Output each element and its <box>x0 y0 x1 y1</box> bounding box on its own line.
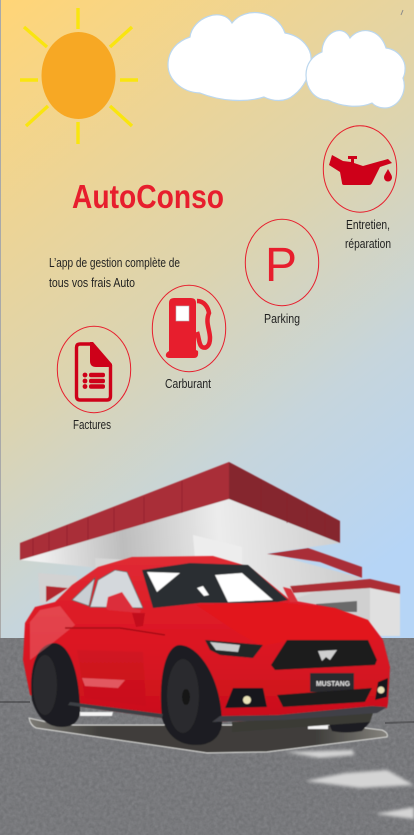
windshield <box>142 563 288 608</box>
hood <box>196 602 378 646</box>
rear canopy <box>267 548 362 578</box>
canopy underside <box>20 499 362 600</box>
title: AutoConso <box>72 178 224 215</box>
label: fuel: Carburant <box>165 376 211 391</box>
ground shadow <box>29 718 387 753</box>
badge <box>318 650 337 661</box>
icon: parking: P <box>265 239 297 292</box>
sky background <box>0 0 414 640</box>
plate <box>310 673 354 692</box>
highlights <box>30 606 75 660</box>
plate: MUSTANG <box>316 679 350 688</box>
icon: fuel pump <box>152 285 226 372</box>
body <box>23 556 390 722</box>
gas station <box>20 462 400 636</box>
front splitter <box>232 713 373 732</box>
door panel <box>77 650 146 706</box>
label: invoices: Factures <box>73 417 111 432</box>
headlight <box>205 640 263 658</box>
label: maintenance: Entretien, <box>346 217 390 232</box>
label: maintenance: réparation <box>345 236 391 251</box>
front wheel <box>161 645 222 745</box>
building left <box>38 573 77 603</box>
side windows <box>72 578 95 606</box>
lower grille <box>277 688 372 707</box>
building red strip <box>290 579 400 594</box>
canopy left face <box>20 462 229 560</box>
icon: small cloud <box>306 31 405 108</box>
tagline: L’app de gestion complète de <box>49 255 180 270</box>
icon: large cloud <box>168 13 311 101</box>
building wall right <box>290 586 400 636</box>
icon: sun <box>20 8 138 144</box>
category: fuel <box>152 285 226 391</box>
canopy right face <box>229 462 340 543</box>
far front tyre <box>328 722 370 732</box>
category: parking <box>245 219 319 326</box>
door sill <box>68 702 163 718</box>
category: maintenance <box>323 126 397 251</box>
mirrors <box>106 592 141 613</box>
category: invoices <box>57 326 131 432</box>
road <box>0 638 414 835</box>
rear wheel <box>31 643 80 727</box>
car <box>23 556 390 753</box>
tagline: tous vos frais Auto <box>49 275 135 290</box>
label: parking: Parking <box>264 311 300 326</box>
icon: oil can <box>323 126 397 212</box>
fog lights <box>225 688 267 708</box>
icon: invoice document <box>57 326 131 413</box>
grille <box>271 640 377 670</box>
